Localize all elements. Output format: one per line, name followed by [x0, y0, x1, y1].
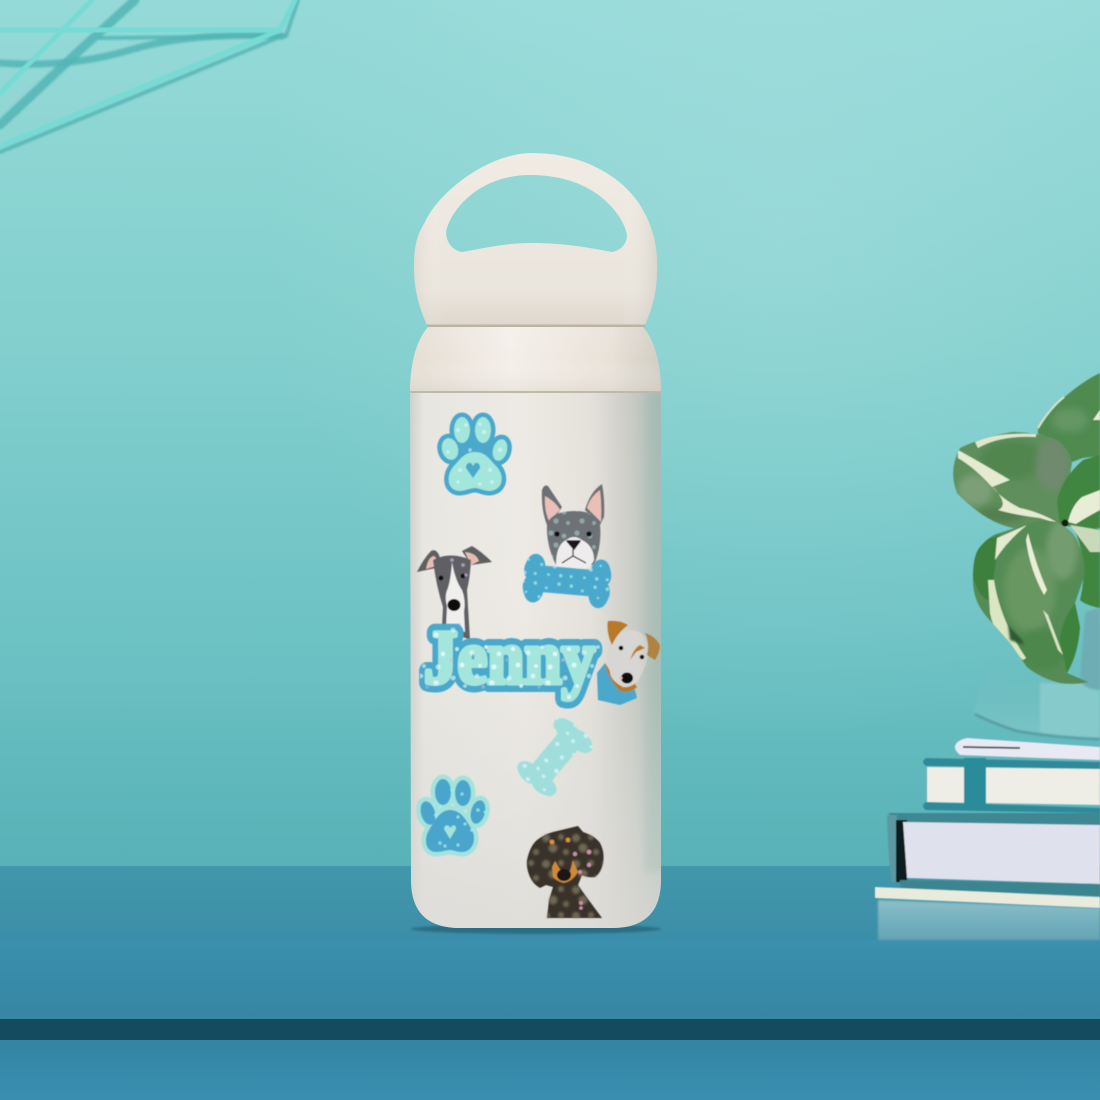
- sticker: Jenny name: Jenny: [424, 616, 595, 700]
- desk front: [0, 940, 1100, 1020]
- desk top surface: [0, 866, 1100, 941]
- plant: [953, 373, 1100, 684]
- bottle shadow on desk: [411, 924, 661, 934]
- leaf: lower right: [1070, 525, 1100, 608]
- elastic band: [964, 758, 986, 810]
- teal wall background: [0, 0, 1100, 870]
- wire frame wall decoration: [0, 0, 298, 152]
- sticker: french bulldog: [542, 484, 604, 571]
- hardback cover: [887, 813, 1100, 896]
- books reflection on desk: [878, 900, 1100, 940]
- leaf: large bottom: [973, 520, 1088, 684]
- white notebook: [955, 738, 1100, 760]
- sticker: blue and mint paw top: [439, 417, 510, 491]
- sticker: greyhound: [417, 546, 492, 640]
- drawer front: [0, 1040, 1100, 1100]
- stack of books: [875, 738, 1100, 908]
- sticker: Jenny name: Jenny: [424, 616, 595, 700]
- sticker: blue bone: [521, 553, 613, 609]
- plant pot: [973, 608, 1100, 739]
- sticker: jack russell: [597, 621, 660, 705]
- leaf: upper right: [1038, 373, 1100, 462]
- bottle: [410, 153, 661, 928]
- teal notebook cover: [923, 758, 1100, 769]
- leaf: right: [1057, 455, 1100, 528]
- sticker: mint and blue paw bottom: [418, 779, 488, 852]
- lid ring: [410, 324, 661, 392]
- desk: [0, 866, 1100, 1100]
- drawer gap: [0, 1019, 1100, 1041]
- leaf: left: [953, 432, 1072, 528]
- sticker: Jenny name: Jenny: [424, 616, 595, 700]
- bottle body: [410, 391, 661, 928]
- notebook pages: [927, 767, 1100, 805]
- bottle edge shading: [644, 392, 664, 872]
- bottom white book: [875, 887, 1100, 908]
- handle and cap: [414, 153, 657, 325]
- sticker: mint bone: [513, 713, 597, 801]
- sticker: dachshund: [527, 826, 604, 918]
